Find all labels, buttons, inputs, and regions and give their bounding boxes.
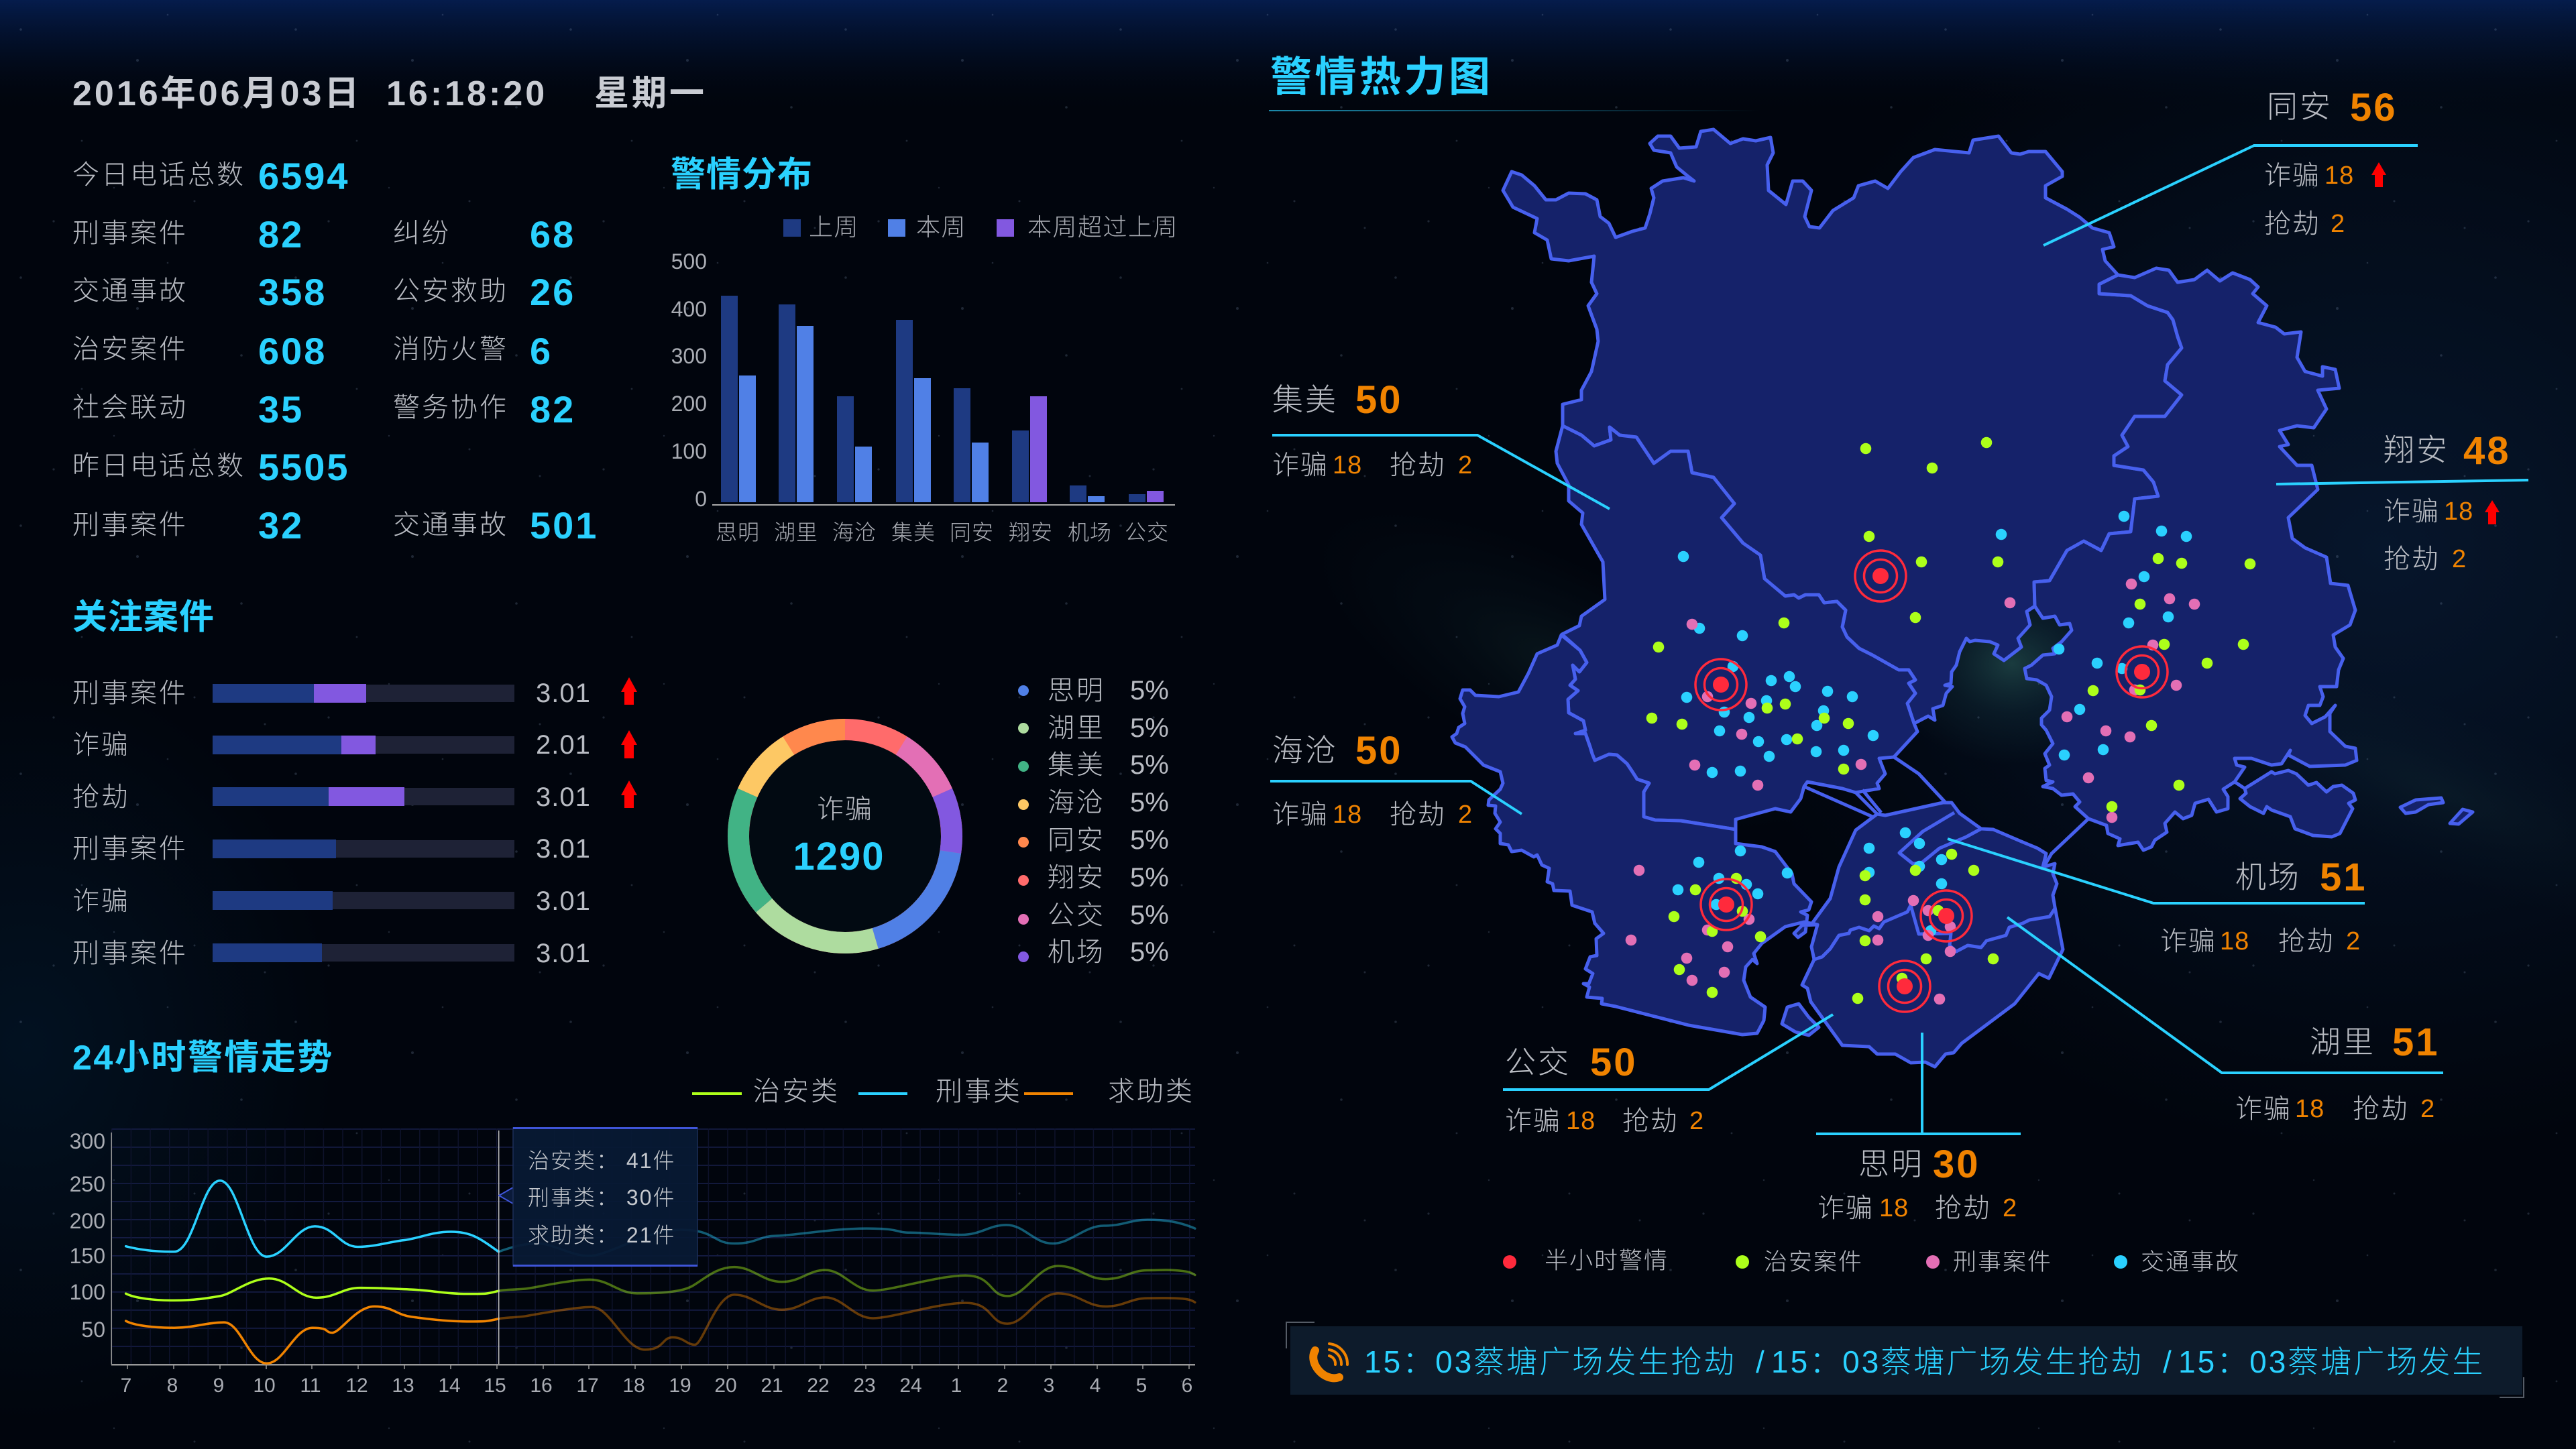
stat: 刑事案件 xyxy=(72,213,304,255)
callout: 翔安 xyxy=(2276,429,2528,574)
stat: 昨日电话总数: 5505 xyxy=(258,446,350,488)
x axis: 机场 xyxy=(1068,520,1112,544)
line chart legend xyxy=(692,1077,1194,1106)
stat: 交通事故: 交通事故 xyxy=(72,276,188,306)
curve: 刑事类 xyxy=(126,1181,1195,1257)
callout: 集美: 2 xyxy=(1458,451,1473,479)
stat: 消防火警 xyxy=(393,330,553,372)
callout: 公交: 18 xyxy=(1566,1107,1595,1135)
line chart legend: 求助类 xyxy=(1108,1077,1194,1106)
callout: 思明: 2 xyxy=(2003,1194,2017,1222)
callout: 集美: 50 xyxy=(1355,378,1403,422)
stat: 交通事故 xyxy=(72,271,327,313)
x axis: 思明 xyxy=(716,520,760,544)
callout: 机场: 机场 xyxy=(2235,860,2301,894)
donut legend: 5% xyxy=(1130,863,1169,892)
stat: 公安救助: 26 xyxy=(530,271,575,313)
x axis labels: 12 xyxy=(345,1375,368,1397)
donut legend: 湖里 xyxy=(1048,713,1105,743)
date and time header: 星期一 xyxy=(594,74,707,113)
x axis: 公交 xyxy=(1125,520,1169,544)
callout: 机场: 18 xyxy=(2220,927,2249,955)
row: 刑事案件 3.01 last xyxy=(72,939,591,968)
x axis labels: 2 xyxy=(997,1375,1008,1397)
x axis labels: 18 xyxy=(622,1375,645,1397)
donut centre label xyxy=(793,795,885,878)
heading: 24小时警情走势: 24小时警情走势 xyxy=(72,1039,334,1078)
x axis labels: 6 xyxy=(1182,1375,1192,1397)
callout: 集美: 18 xyxy=(1333,451,1362,479)
y axis labels: 100 xyxy=(70,1280,105,1304)
donut centre label: 诈骗 xyxy=(817,795,873,824)
donut legend: 5% xyxy=(1130,825,1169,855)
row: 刑事案件 3.01 last: 3.01 xyxy=(536,939,591,968)
x axis labels: 7 xyxy=(121,1375,131,1397)
row: 刑事案件 3.01 up: 3.01 xyxy=(536,679,591,708)
stat: 纠纷: 纠纷 xyxy=(393,219,451,248)
cursor line xyxy=(498,1131,499,1364)
callout: 湖里: 51 xyxy=(2392,1021,2440,1064)
row: 诈骗 3.01 xyxy=(72,886,591,916)
island: east small xyxy=(2400,798,2443,813)
x axis: 同安 xyxy=(950,520,994,544)
x axis labels: 19 xyxy=(669,1375,691,1397)
row: 诈骗 3.01: 3.01 xyxy=(536,886,591,916)
x axis labels: 4 xyxy=(1090,1375,1101,1397)
x axis labels: 14 xyxy=(438,1375,461,1397)
y axis labels: 200 xyxy=(70,1209,105,1233)
callout: 同安 xyxy=(2043,86,2418,245)
callout: 公交: 抢劫 xyxy=(1622,1106,1679,1136)
map dots: 刑事案件 xyxy=(1626,579,2200,1004)
x axis labels xyxy=(121,1375,1192,1397)
stat: 社会联动: 35 xyxy=(258,388,304,430)
heading: 警情热力图: 警情热力图 xyxy=(1270,54,1494,101)
x axis: 湖里 xyxy=(774,520,818,544)
donut legend: 同安 xyxy=(1048,825,1105,855)
y axis labels: 100 xyxy=(671,439,707,463)
x axis labels: 11 xyxy=(300,1375,321,1397)
border: 思明 湖里 xyxy=(1814,905,2055,960)
stat: 消防火警: 消防火警 xyxy=(393,335,508,364)
chart legend: 本周 xyxy=(916,213,966,241)
ticker text: / xyxy=(2163,1344,2174,1379)
y axis labels: 300 xyxy=(671,344,707,368)
callout: 公交: 2 xyxy=(1689,1107,1704,1135)
row: 刑事案件 3.01 up: 刑事案件 xyxy=(72,679,188,708)
map legend: 治安案件 xyxy=(1764,1249,1863,1275)
region: 集美 xyxy=(1556,426,1917,829)
date and time header xyxy=(72,74,707,113)
x axis labels: 21 xyxy=(761,1375,783,1397)
callout: 集美: 抢劫 xyxy=(1390,451,1446,480)
callout: 公交: 公交 xyxy=(1505,1045,1571,1080)
stat: 社会联动 xyxy=(72,388,304,430)
ticker text: 15：03蔡塘广场发生抢劫 xyxy=(1771,1344,2143,1379)
stat: 警务协作: 82 xyxy=(530,388,575,430)
callout: 公交: 诈骗 xyxy=(1505,1106,1561,1136)
callout: 公交 xyxy=(1503,1015,1833,1136)
row: 诈骗 2.01 up xyxy=(72,730,637,760)
bar chart: 警情分布 xyxy=(671,213,1178,544)
row: 刑事案件 3.01: 刑事案件 xyxy=(72,834,188,864)
curve: 求助类 xyxy=(126,1293,1195,1363)
stat: 纠纷: 68 xyxy=(530,213,575,255)
heading: 关注案件: 关注案件 xyxy=(72,598,215,637)
callout: 湖里: 湖里 xyxy=(2310,1025,2375,1059)
callout: 思明: 18 xyxy=(1879,1194,1909,1222)
callout: 思明: 诈骗 xyxy=(1817,1194,1874,1223)
callout: 海沧: 诈骗 xyxy=(1272,800,1329,829)
callout: 翔安: 翔安 xyxy=(2384,432,2449,467)
callout: 同安: 诈骗 xyxy=(2264,161,2320,190)
donut legend: 5% xyxy=(1130,901,1169,930)
x axis: 集美 xyxy=(891,520,936,544)
region: 海沧 xyxy=(1452,635,1817,1035)
ticker text: 15：03蔡塘广场发生 xyxy=(2178,1344,2485,1379)
callout: 翔安: 2 xyxy=(2452,545,2467,573)
stat: 警务协作 xyxy=(393,388,575,430)
stat: 治安案件 xyxy=(72,330,327,372)
callout: 海沧: 2 xyxy=(1458,801,1473,829)
map: districts xyxy=(1452,129,2473,1067)
callout: 同安: 56 xyxy=(2350,86,2398,129)
y axis labels: 200 xyxy=(671,392,707,416)
stat: 昨日电话总数: 昨日电话总数 xyxy=(72,451,245,481)
ticker bar xyxy=(1286,1322,2524,1397)
stat: 昨日刑事案件 xyxy=(72,504,304,546)
callout: 公交: 50 xyxy=(1590,1041,1638,1084)
donut legend: 公交 xyxy=(1048,901,1105,930)
callout: 同安: 抢劫 xyxy=(2264,209,2320,239)
island: east tiny xyxy=(2450,809,2473,824)
region: 翔安 xyxy=(2025,268,2357,850)
stat: 昨日交通事故: 501 xyxy=(530,504,598,546)
donut chart: 诈骗 1290 xyxy=(738,730,952,943)
heading: 警情分布: 警情分布 xyxy=(671,156,813,194)
y axis labels: 400 xyxy=(671,297,707,321)
tooltip: 刑事类： 30件 xyxy=(528,1185,676,1210)
stat: 刑事案件: 刑事案件 xyxy=(72,219,188,248)
donut legend: 5% xyxy=(1130,750,1169,780)
stat: 昨日刑事案件: 刑事案件 xyxy=(72,510,188,540)
callout: 同安: 2 xyxy=(2331,210,2345,238)
date and time header: 2016年06月03日 xyxy=(72,74,361,113)
callout: 同安: 同安 xyxy=(2267,89,2333,124)
stat: 昨日交通事故 xyxy=(393,504,598,546)
stat: 公安救助 xyxy=(393,271,575,313)
line chart legend: 刑事类 xyxy=(936,1077,1022,1106)
stat: 纠纷 xyxy=(393,213,575,255)
callout: 集美: 诈骗 xyxy=(1272,451,1329,480)
date and time header: 16:18:20 xyxy=(386,74,547,113)
x axis labels: 22 xyxy=(807,1375,830,1397)
row: 抢劫 3.01 up xyxy=(72,780,637,812)
callout: 集美: 集美 xyxy=(1272,382,1338,417)
row: 抢劫 3.01 up: 3.01 xyxy=(536,783,591,812)
line chart: 24 hour trend xyxy=(70,1127,1195,1397)
donut legend: 5% xyxy=(1130,713,1169,743)
callout: 机场: 51 xyxy=(2320,856,2367,899)
x axis labels: 10 xyxy=(253,1375,276,1397)
chart legend: 本周超过上周 xyxy=(1027,213,1178,241)
callout: 翔安: 抢劫 xyxy=(2384,544,2440,574)
y axis labels: 250 xyxy=(70,1172,105,1196)
map markers: 半小时警情 rings xyxy=(1695,550,2168,1012)
row: 刑事案件 3.01 xyxy=(72,834,591,864)
map dots: 治安案件 xyxy=(1646,437,2255,1004)
ticker text: / xyxy=(1756,1344,1767,1379)
callout: 海沧: 抢劫 xyxy=(1390,800,1446,829)
map legend: 刑事案件 xyxy=(1953,1249,2052,1275)
stat: 交通事故: 358 xyxy=(258,271,327,313)
region: 思明 and 湖里 xyxy=(1802,803,2063,1067)
stat: 警务协作: 警务协作 xyxy=(393,393,508,422)
x axis: 海沧 xyxy=(832,520,877,544)
callout: 同安: 18 xyxy=(2325,162,2354,190)
row: 刑事案件 3.01: 3.01 xyxy=(536,834,591,864)
callout: 湖里: 18 xyxy=(2295,1095,2325,1123)
x axis labels: 13 xyxy=(392,1375,414,1397)
row: 抢劫 3.01 up: 抢劫 xyxy=(72,783,130,812)
x axis: 翔安 xyxy=(1009,520,1053,544)
x axis labels: 9 xyxy=(213,1375,224,1397)
region: 机场 xyxy=(1899,813,1981,864)
row: 诈骗 3.01: 诈骗 xyxy=(72,886,130,916)
ticker text: 15：03蔡塘广场发生抢劫 xyxy=(1364,1344,1736,1379)
donut legend: 5% xyxy=(1130,788,1169,817)
stat: 消防火警: 6 xyxy=(530,330,553,372)
stat: 治安案件: 治安案件 xyxy=(72,335,188,364)
donut centre label: 1290 xyxy=(793,835,885,878)
x axis labels: 23 xyxy=(853,1375,876,1397)
y axis labels: 50 xyxy=(81,1318,105,1342)
stat: 社会联动: 社会联动 xyxy=(72,393,188,422)
map dots: 交通事故 xyxy=(1673,511,2192,936)
callout: 湖里: 诈骗 xyxy=(2235,1094,2292,1124)
callout: 海沧: 海沧 xyxy=(1272,733,1338,768)
callout: 思明: 30 xyxy=(1933,1143,1980,1186)
x axis xyxy=(712,504,1175,544)
donut legend: 5% xyxy=(1130,937,1169,967)
island: 鼓浪屿 xyxy=(1782,1004,1819,1035)
panel: watched cases bars xyxy=(72,677,637,968)
callout: 海沧: 18 xyxy=(1333,801,1362,829)
icon: phone xyxy=(1313,1344,1347,1378)
donut legend: 机场 xyxy=(1048,937,1105,967)
callout: 翔安: 诈骗 xyxy=(2384,497,2440,526)
donut legend xyxy=(1018,676,1169,967)
map legend: 交通事故 xyxy=(2141,1249,2240,1275)
x axis labels: 15 xyxy=(484,1375,506,1397)
x axis labels: 24 xyxy=(899,1375,922,1397)
island: 大嶝 xyxy=(2240,770,2355,837)
curve: 治安类 xyxy=(126,1266,1195,1300)
row: 诈骗 2.01 up: 诈骗 xyxy=(72,730,130,760)
stat: 昨日刑事案件: 32 xyxy=(258,504,304,546)
bridges xyxy=(1804,757,2245,865)
callout: 海沧 xyxy=(1270,729,1522,829)
map legend xyxy=(1503,1248,2240,1275)
donut legend: 思明 xyxy=(1048,676,1105,705)
callout: 集美 xyxy=(1272,378,1610,509)
chart legend xyxy=(783,213,1178,241)
x axis labels: 17 xyxy=(576,1375,599,1397)
y axis labels xyxy=(671,249,707,511)
stat: 公安救助: 公安救助 xyxy=(393,276,508,306)
stat: 今日电话总数 xyxy=(72,155,350,197)
callout: 机场: 抢劫 xyxy=(2278,927,2335,956)
callout: 机场: 诈骗 xyxy=(2160,927,2217,956)
callout: 思明: 思明 xyxy=(1858,1147,1924,1181)
y axis labels: 0 xyxy=(695,487,707,511)
x axis labels: 20 xyxy=(714,1375,737,1397)
row: 刑事案件 3.01 up xyxy=(72,677,637,708)
callout: 机场: 2 xyxy=(2346,927,2361,955)
curves xyxy=(126,1181,1195,1363)
y axis labels: 300 xyxy=(70,1129,105,1153)
x axis labels: 3 xyxy=(1044,1375,1054,1397)
row: 诈骗 2.01 up: 2.01 xyxy=(536,730,591,760)
donut legend: 海沧 xyxy=(1048,788,1105,817)
map legend: 半小时警情 xyxy=(1545,1248,1669,1274)
region: 同安 xyxy=(1503,129,2182,723)
panel: call statistics xyxy=(72,155,598,546)
x axis labels: 8 xyxy=(167,1375,178,1397)
callout: 湖里 xyxy=(2007,917,2443,1124)
stat: 昨日电话总数 xyxy=(72,446,350,488)
donut legend: 集美 xyxy=(1048,750,1105,780)
x axis labels: 5 xyxy=(1136,1375,1147,1397)
y axis labels xyxy=(70,1129,105,1342)
stat: 刑事案件: 82 xyxy=(258,213,304,255)
line chart legend: 治安类 xyxy=(753,1077,840,1106)
row: 刑事案件 3.01 last: 刑事案件 xyxy=(72,939,188,968)
chart legend: 上周 xyxy=(809,213,859,241)
donut legend: 翔安 xyxy=(1048,863,1105,892)
callout: 海沧: 50 xyxy=(1355,729,1403,772)
callout: 湖里: 2 xyxy=(2420,1095,2435,1123)
x axis labels: 16 xyxy=(530,1375,553,1397)
tooltip: 治安类： 41件 xyxy=(528,1149,676,1173)
callout: 思明: 抢劫 xyxy=(1935,1194,1991,1223)
ticker text xyxy=(1364,1344,2485,1379)
callout: 翔安: 18 xyxy=(2444,498,2473,526)
axes and ticks xyxy=(111,1133,1195,1369)
stat: 昨日交通事故: 交通事故 xyxy=(393,510,508,540)
tooltip xyxy=(499,1127,697,1267)
donut legend: 5% xyxy=(1130,676,1169,705)
callout: 思明 xyxy=(1816,1033,2021,1223)
bars xyxy=(721,296,1164,502)
callout: 翔安: 48 xyxy=(2463,429,2511,473)
callout: 机场 xyxy=(1948,839,2367,956)
stat: 今日电话总数: 6594 xyxy=(258,155,350,197)
tooltip: 求助类： 21件 xyxy=(528,1223,676,1247)
y axis labels: 500 xyxy=(671,249,707,274)
callout: 湖里: 抢劫 xyxy=(2353,1094,2409,1124)
stat: 今日电话总数: 今日电话总数 xyxy=(72,160,245,190)
stat: 治安案件: 608 xyxy=(258,330,327,372)
x axis labels: 1 xyxy=(951,1375,962,1397)
y axis labels: 150 xyxy=(70,1244,105,1268)
